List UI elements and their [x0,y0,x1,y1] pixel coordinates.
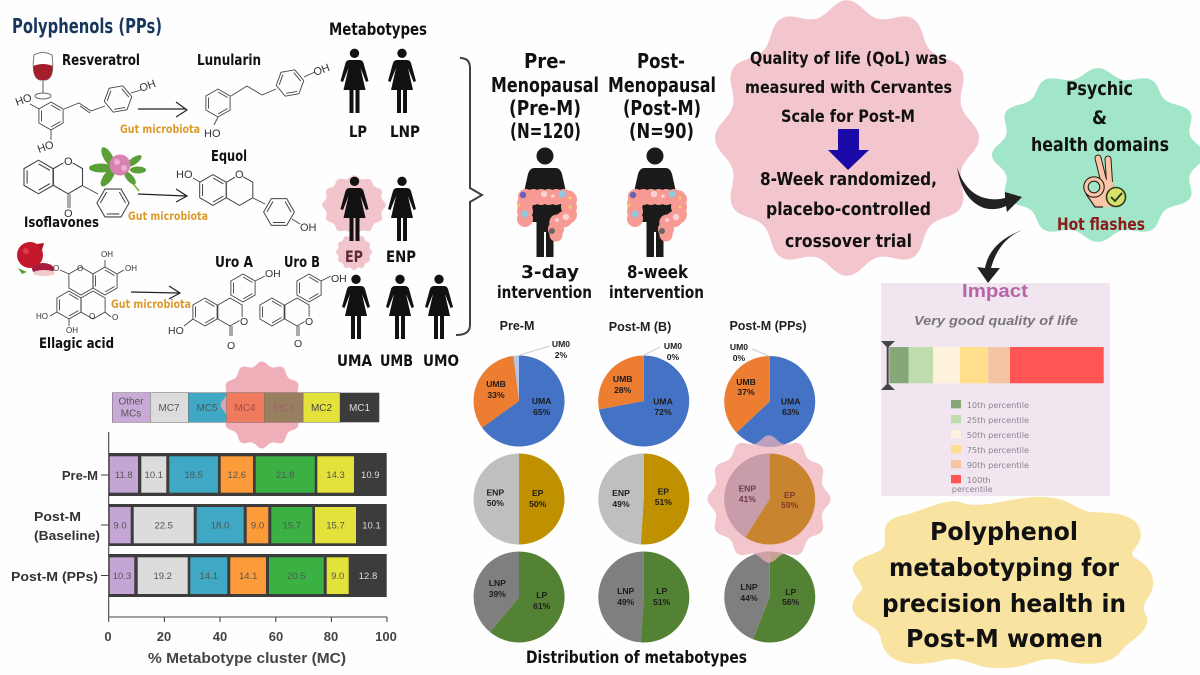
chart axes: 40 [213,629,227,644]
molecule: ellagic acid: O [112,313,118,322]
pie data labels: 50% [529,499,547,509]
pie: equol post-M B [598,453,689,544]
molecule: ellagic acid: O [53,264,59,273]
label: 8-week intervention [609,262,704,303]
bar: pre-M: 12.6 [228,470,246,481]
pie data labels: LP [536,590,547,600]
label: ENP: ENP [386,247,416,266]
pie: urolithins post-M PPs [724,356,815,447]
arrow: isoflavones to equol [138,189,187,202]
chart axes: 80 [324,629,338,644]
pie: lunularin pre-M [474,551,565,642]
molecule: isoflavones [24,156,133,224]
molecule: uro a: O [240,316,248,328]
chart axes: 20 [157,629,171,644]
arrow: QoL to domains [957,167,1022,212]
pie column title: pre-M: Pre-M [500,319,534,333]
legend: metabotype clusters: MC5 [196,403,218,414]
title text: Polyphenol [930,517,1078,546]
bar: pre-M: 10.9 [361,470,380,481]
pie data labels: 49% [617,597,635,607]
panel: psychic and health domains [992,68,1200,242]
pie data labels: 56% [782,597,800,607]
icon: woman LP [340,49,368,113]
molecule: isoflavones: O [64,208,73,220]
panel: polyphenols and metabotypes [12,14,459,370]
arrow: blue down [828,129,869,170]
icon: woman LNP [388,49,416,113]
heading: pre-menopausal group: (Pre-M) [509,96,581,120]
heading: polyphenols: Polyphenols (PPs) [12,14,162,38]
bar: pre-M [109,453,387,496]
heading: pre-menopausal group: (N=120) [510,119,581,143]
highlight: EP pie blob [708,435,830,563]
molecule: equol: OH [300,222,317,234]
bar: post-M PPs [109,554,387,597]
percentile legend: percentile [952,484,993,494]
bar: post-M baseline: 18.0 [211,520,229,532]
bar: post-M PPs: 19.2 [153,571,172,582]
blob background [715,0,979,276]
label: equol: Equol [211,147,247,165]
bar: post-M baseline: 15.7 [326,520,345,532]
heading: post-menopausal group [608,49,716,143]
molecule: ellagic acid [36,250,137,335]
pie: lunularin post-M B [598,551,689,642]
pie column title: post-M B: Post-M (B) [609,320,671,334]
brace [456,58,482,335]
pie data labels: 61% [533,601,551,611]
pie data labels: UMB [486,379,506,389]
heading: post-menopausal group: (N=90) [629,119,694,143]
bar: post-M baseline: 9.0 [113,520,127,532]
molecule: uro b: O [305,316,313,328]
label: UMB: UMB [380,351,413,370]
pie: equol pre-M [474,454,564,544]
bar: pre-M: 14.3 [326,470,345,481]
pie data labels: EP [532,488,544,498]
label: uro b: Uro B [284,253,320,271]
text: trial design [760,170,937,252]
bar: post-M baseline: 22.5 [154,520,173,532]
bar: post-M PPs: 20.5 [287,571,306,582]
bar: pre-M: 18.5 [184,470,203,481]
heading: pre-menopausal group: Menopausal [491,73,599,97]
molecule: uro a: OH [265,268,281,280]
molecule: equol: O [235,169,244,181]
legend: metabotype clusters: MC2 [311,403,332,414]
percentile legend: 10th percentile [967,400,1029,410]
pie: equol post-M PPs [724,454,815,544]
bar: post-M baseline: 9.0 [251,520,264,532]
heading: metabotypes: Metabotypes [329,20,427,39]
legend: highlighted MC4 and MC3: MC4 [234,403,256,414]
molecule: uro b [260,273,347,350]
chart axes: 60 [269,629,283,644]
pie data labels: 37% [737,387,755,397]
icon: pomegranate [17,242,55,276]
molecule: lunularin: HO [204,128,221,140]
pie data labels: UM0 [730,342,748,352]
molecule: resveratrol [14,78,158,156]
pie data labels: ENP [486,488,504,498]
blob background [992,68,1200,242]
row label: post-M PPs: Post-M (PPs) [11,569,98,584]
pie data labels: 41% [739,494,756,504]
bar: pre-M: 11.8 [115,470,133,481]
icon: woman EP [340,177,368,241]
molecule: uro b: O [294,338,302,350]
pie leader lines [520,346,769,356]
heading: post-menopausal group: (Post-M) [623,96,701,120]
panel background [881,283,1110,496]
molecule: equol: HO [176,169,193,181]
icon: woman UMB [386,275,414,339]
caption: distribution of metabotypes: Distribution of metabotypes [526,648,747,668]
pie: urolithins pre-M [474,355,565,446]
pie data labels: UMA [653,396,673,406]
pie data labels: UM0 [664,341,682,351]
bar: pre-M: 10.1 [145,470,163,481]
percentile legend: 90th percentile [967,460,1029,470]
legend: metabotype clusters: MC1 [349,403,370,414]
pie data labels: 0% [733,353,746,363]
icon: clover flower [89,145,146,191]
heading: impact: Impact [962,280,1028,301]
molecule: resveratrol: HO [36,139,56,156]
molecule: uro a: HO [168,325,184,337]
legend: metabotype clusters: MC7 [158,403,180,414]
icon: ok hand with check [1086,158,1126,207]
text: psychic and health domains: Psychic [1066,78,1133,100]
pie data labels: LP [656,586,667,596]
panel: quality of life blob [715,0,979,276]
pie column title: post-M PPs: Post-M (PPs) [729,319,807,333]
arrow: ellagic acid to urolithins [131,286,180,299]
bar: post-M baseline [109,504,387,546]
bar: post-M PPs: 12.8 [359,571,377,582]
pie data labels: LNP [489,578,506,588]
marker: I-beam [881,341,895,390]
pie data labels [486,339,800,611]
icon: woman UMO [425,275,453,339]
text: QoL measurement: Scale for Post-M [781,107,915,127]
pie data labels: 63% [782,407,800,417]
text: QoL measurement: measured with Cervantes [745,78,952,98]
pie data labels: 2% [555,350,568,360]
chart axes: 100 [375,629,397,644]
text: QoL measurement [745,49,952,127]
molecule: ellagic acid: O [77,264,83,273]
icon: person with gut, pre-M [518,148,572,257]
icon: wine glass [33,52,53,99]
label: 3-day intervention: intervention [497,283,592,303]
row label: post-M baseline: (Baseline) [34,528,100,543]
pie data labels: UM0 [552,339,570,349]
text: psychic and health domains: & [1092,107,1107,129]
molecule: lunularin [204,62,332,140]
blob background [853,497,1153,668]
pie data labels: 33% [487,390,505,400]
bar: post-M PPs: 14.1 [200,571,218,582]
panel: metabotype pie charts [474,319,830,668]
percentile legend [951,400,1029,494]
percentile legend: 100th [967,475,991,485]
molecule: ellagic acid: OH [125,264,137,273]
bar: post-M PPs: 14.1 [239,571,257,582]
icon: woman UMA [342,275,370,339]
row label: pre-M: Pre-M [62,468,98,483]
title text: Post-M women [906,624,1103,653]
text: trial design: crossover trial [785,232,912,252]
row label: post-M baseline [34,509,100,543]
pie data labels: UMA [781,396,800,406]
label: 8-week intervention: 8-week [627,262,689,283]
label: UMO: UMO [423,351,459,370]
pie: lunularin post-M PPs [724,551,815,642]
heading: pre-menopausal group [491,49,599,143]
bar: post-M PPs: 9.0 [331,571,344,582]
percentile legend: 50th percentile [967,430,1029,440]
pie data labels: 51% [653,597,671,607]
legend: highlighted MC4 and MC3: MC3 [273,403,295,414]
pie data labels: 65% [533,407,551,417]
label: uro a: Uro A [215,253,253,271]
pie data labels: LP [785,587,796,597]
bar: post-M baseline: 15.7 [283,520,301,532]
text: psychic and health domains: health domains [1031,134,1169,156]
arrow: resveratrol to lunularin [138,102,187,117]
label: ellagic acid: Ellagic acid [39,336,114,352]
molecule: resveratrol: OH [138,78,158,95]
pie data labels: ENP [612,488,630,498]
pie data labels: 72% [654,407,672,417]
label: 3-day intervention [497,262,592,303]
pie data labels: UMB [736,377,756,387]
pie data labels: UMB [613,374,632,384]
subtitle: Very good quality of life [914,313,1078,328]
panel: conclusion [853,497,1153,668]
title text [882,517,1126,653]
label: isoflavones: Isoflavones [24,215,99,231]
row label: post-M baseline: Post-M [34,509,81,524]
panel: stacked bar chart [11,362,397,667]
text: trial design: 8-Week randomized, [760,170,937,190]
label: LP: LP [349,122,367,141]
heading: post-menopausal group: Menopausal [608,73,716,97]
molecule: ellagic acid: HO [36,312,48,321]
text: trial design: placebo-controlled [766,200,931,220]
text: hot flashes: Hot flashes [1057,215,1145,234]
axis title: % Metabotype cluster (MC) [148,651,346,667]
icon: woman ENP [388,177,416,241]
label: EP: EP [345,247,363,266]
pie data labels: 51% [655,497,672,507]
molecule: uro a: O [227,340,235,352]
arrow: domains to impact [977,228,1028,283]
highlight: EP blob [322,175,386,270]
pie data labels: 49% [612,499,630,509]
title text: metabotyping for [889,553,1120,582]
molecule: resveratrol: HO [14,92,34,109]
molecule: uro a [168,268,281,352]
molecule: isoflavones: O [64,156,73,168]
panel: study groups [491,49,716,303]
pie data labels: 44% [740,593,758,603]
label: gut microbiota 2: Gut microbiota [128,209,208,223]
pie data labels: LNP [617,586,635,596]
label: gut microbiota 1: Gut microbiota [120,122,200,136]
pie data labels: UMA [532,396,551,406]
pie: urolithins post-M B [598,356,689,446]
label: 8-week intervention: intervention [609,283,704,303]
chart axes: 0 [104,629,112,644]
panel: impact [881,280,1110,496]
title text: precision health in [882,589,1126,618]
pie data labels: 39% [489,589,506,599]
legend: metabotype clusters: MCs [121,408,141,420]
legend: metabotype clusters: Other [118,396,144,408]
pie data labels: EP [784,490,796,500]
label: lunularin: Lunularin [197,51,261,69]
molecule: ellagic acid: OH [101,250,113,259]
icon: person with gut, post-M [628,148,682,257]
chart axes [101,432,397,644]
molecule: ellagic acid: O [89,312,95,321]
text: psychic and health domains [1031,78,1169,156]
pie data labels: ENP [738,484,756,494]
pie data labels: EP [658,486,669,496]
bar: pre-M: 21.8 [276,470,294,481]
molecule: lunularin: OH [312,62,332,79]
bar: post-M PPs: 10.3 [113,571,131,582]
percentile legend: 75th percentile [967,445,1029,455]
molecule: ellagic acid: OH [66,326,78,335]
text: QoL measurement: Quality of life (QoL) was [750,49,947,69]
molecule: uro b: OH [331,273,347,285]
heading: pre-menopausal group: Pre- [524,49,566,73]
legend: metabotype clusters [112,393,379,422]
label: resveratrol: Resveratrol [62,51,140,69]
highlight: MC blob [221,362,303,448]
label: gut microbiota 3: Gut microbiota [111,297,191,311]
percentile bar [889,347,1104,383]
label: LNP: LNP [390,122,420,141]
pie data labels: LNP [740,582,758,592]
molecule: equol [176,169,317,234]
percentile legend: 25th percentile [967,415,1029,425]
pie data labels: 50% [487,498,504,508]
bar: post-M baseline: 10.1 [362,520,381,532]
legend: highlighted MC4 and MC3 [227,393,303,422]
pie data labels: 59% [781,500,799,510]
heading: post-menopausal group: Post- [637,49,685,73]
pie data labels: 0% [667,352,680,362]
label: 3-day intervention: 3-day [521,262,579,283]
pie data labels: 28% [614,385,632,395]
label: UMA: UMA [337,351,373,370]
